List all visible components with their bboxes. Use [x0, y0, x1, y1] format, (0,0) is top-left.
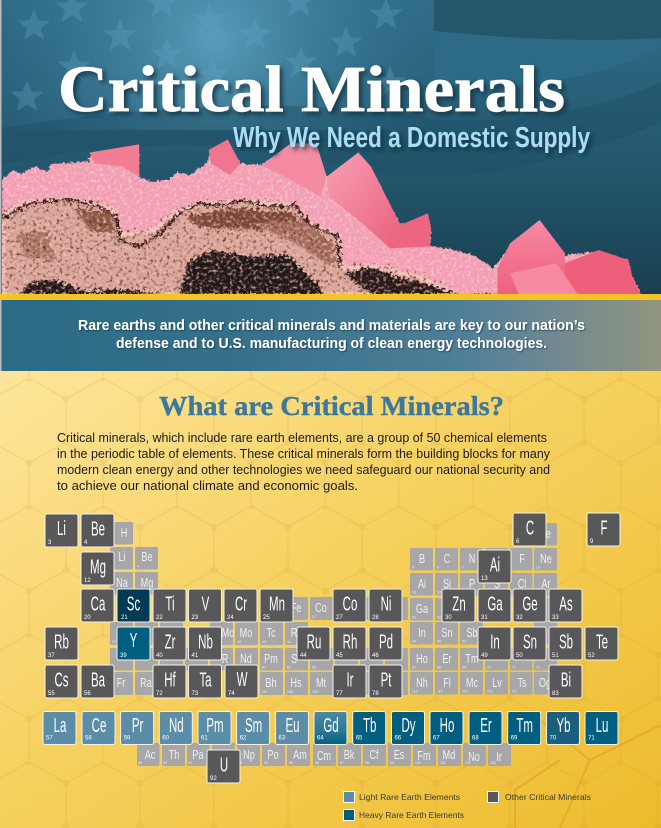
background grey periodic table: Ga: [416, 603, 429, 616]
critical mineral tiles: Sn: [523, 630, 537, 653]
background grey periodic table: 51: [462, 640, 466, 644]
critical mineral tiles: F: [600, 516, 608, 539]
background grey periodic table: 49: [412, 640, 416, 644]
background grey periodic table: Md: [443, 749, 455, 762]
background grey periodic table: Nh: [416, 677, 428, 690]
critical mineral tiles: Hf: [164, 668, 176, 691]
critical mineral tiles: 4: [84, 540, 88, 546]
banner text: [78, 318, 585, 352]
background grey periodic table: Po: [267, 749, 279, 762]
background grey periodic table: F: [519, 553, 525, 566]
background grey periodic table: S: [291, 653, 297, 666]
background grey periodic table: 32: [437, 616, 441, 620]
flag stars: [10, 0, 406, 111]
background grey periodic table: In: [418, 627, 426, 640]
critical mineral tiles: 73: [192, 691, 199, 697]
critical mineral tiles: 83: [552, 691, 559, 697]
background grey periodic table: 89: [138, 761, 142, 765]
yellow content panel: [0, 371, 661, 828]
background grey periodic table: Ai: [418, 578, 426, 591]
background grey periodic table: 115: [462, 690, 468, 694]
light rare earth tiles: Eu: [285, 713, 300, 737]
critical mineral tiles: 6: [516, 539, 520, 545]
background grey periodic table: Mt: [316, 677, 327, 690]
critical mineral tiles: 24: [227, 615, 234, 621]
background grey periodic table: Tm: [465, 653, 479, 666]
background grey periodic table: Li: [118, 551, 126, 564]
light rare earth tiles: Ce: [92, 713, 106, 737]
light rare earth tiles: 60: [162, 736, 170, 742]
flag stripes: [0, 0, 661, 177]
intro banner: [2, 300, 661, 371]
background grey periodic table: 91: [188, 761, 192, 765]
background grey periodic table: Nd: [240, 653, 252, 666]
critical mineral tiles: 44: [300, 653, 307, 659]
heavy rare earth tiles: 65: [356, 736, 363, 742]
background grey periodic table: Ar: [541, 578, 551, 591]
body paragraph: to achieve our national climate and economic goals.: [57, 478, 358, 493]
light rare earth tiles: 63: [278, 736, 286, 742]
background grey periodic table: 103: [490, 761, 496, 765]
heavy rare earth tiles: Tm: [516, 713, 533, 737]
background grey periodic table: Am: [293, 749, 307, 762]
mineral inner banding: [2, 198, 455, 294]
critical mineral tiles: Ai: [490, 553, 500, 576]
background grey periodic table: Fr: [117, 677, 126, 690]
background grey periodic table: 107: [262, 690, 268, 694]
background grey periodic table: 62: [287, 666, 291, 670]
critical mineral tiles: 33: [552, 615, 559, 621]
critical mineral tiles: 30: [445, 615, 452, 621]
critical mineral tiles: Li: [57, 516, 66, 540]
legend: light rare earth: Light Rare Earth Elements: [359, 792, 460, 802]
light rare earth tiles: Pm: [206, 713, 224, 737]
critical mineral tiles: 9: [590, 539, 594, 545]
heavy rare earth tiles: 66: [394, 736, 402, 742]
background grey periodic table: 100: [415, 761, 421, 765]
critical mineral tiles: Ta: [199, 668, 212, 691]
background grey periodic table: 102: [465, 761, 471, 765]
light rare earth tiles: 64: [317, 736, 324, 742]
background grey periodic table: Fe: [291, 602, 301, 615]
light rare earth tiles: [43, 712, 347, 744]
background grey periodic table: 67: [412, 666, 416, 670]
background grey periodic table: 99: [390, 761, 394, 765]
heavy rare earth tiles: Dy: [401, 713, 416, 737]
mineral crystals: [89, 139, 641, 294]
background grey periodic table: 14: [437, 590, 441, 594]
critical mineral tiles: Cr: [235, 592, 247, 615]
body paragraph: [57, 430, 550, 493]
critical mineral tiles: 74: [228, 691, 235, 697]
critical mineral tiles: As: [559, 592, 573, 615]
mineral crust: [2, 147, 641, 294]
critical mineral tiles: Cs: [54, 668, 69, 691]
heavy rare earth tiles: 68: [472, 736, 479, 742]
background grey periodic table: Mg: [141, 577, 153, 590]
critical mineral tiles: Mg: [90, 555, 106, 578]
background grey periodic table: N: [469, 553, 475, 566]
background grey periodic table: 70: [487, 666, 491, 670]
background grey periodic table: 60: [237, 666, 241, 670]
background grey periodic table: 4: [137, 564, 139, 568]
background grey periodic table: R: [222, 653, 228, 666]
background grey periodic table: No: [468, 751, 480, 764]
critical mineral tiles: Te: [596, 630, 608, 653]
background grey periodic table: Tc: [266, 627, 276, 640]
critical mineral tiles: C: [526, 516, 534, 539]
background grey periodic table: 96: [315, 761, 319, 765]
background grey periodic table: H: [121, 527, 127, 540]
background grey periodic table: 98: [365, 761, 369, 765]
critical mineral tiles: Ni: [381, 592, 391, 615]
background grey periodic table: 114: [437, 690, 443, 694]
flag canton glow: [0, 0, 434, 130]
critical mineral tiles: 25: [263, 615, 270, 621]
critical mineral tiles: Ge: [522, 592, 538, 615]
background grey periodic table: Er: [442, 653, 452, 666]
critical mineral tiles: Zn: [452, 592, 466, 615]
background grey periodic table: P: [469, 578, 475, 591]
background grey periodic table: R: [291, 627, 297, 640]
background grey periodic table: 95: [289, 761, 293, 765]
background grey periodic table: S: [494, 578, 500, 591]
critical mineral tiles: 22: [156, 615, 163, 621]
legend: other critical minerals: Other Critical Minerals: [505, 792, 591, 802]
heavy rare earth tiles: 69: [511, 736, 518, 742]
background grey periodic table: Bk: [344, 749, 355, 762]
background grey periodic table: 109: [312, 690, 318, 694]
scandium and yttrium tiles: Y: [130, 628, 137, 652]
critical mineral tiles: Be: [91, 517, 105, 540]
background grey periodic table: 71: [512, 666, 516, 670]
critical mineral tiles: Rh: [343, 630, 357, 653]
background grey periodic table: 37: [112, 640, 116, 644]
heavy rare earth tiles: 71: [588, 736, 595, 742]
light rare earth tiles: 59: [124, 736, 131, 742]
critical mineral tiles: 52: [588, 653, 595, 659]
background grey periodic table: 13: [412, 590, 416, 594]
critical mineral tiles: Pd: [379, 630, 393, 653]
critical mineral tiles: Ru: [307, 630, 321, 653]
light rare earth tiles: La: [54, 713, 67, 737]
light rare earth tiles: Sm: [245, 713, 262, 737]
critical mineral tiles: 50: [516, 653, 523, 659]
legend: [344, 792, 591, 820]
light rare earth tiles: Pr: [132, 713, 144, 737]
banner text: defense and to U.S. manufacturing of clean energy technologies.: [116, 336, 547, 352]
background grey periodic table: 43: [262, 640, 266, 644]
critical mineral tiles: 77: [336, 691, 343, 697]
background grey periodic table: 97: [340, 761, 344, 765]
critical mineral tiles: U: [220, 753, 228, 776]
background grey periodic table: 68: [437, 666, 441, 670]
light rare earth tiles: 58: [85, 736, 92, 742]
background grey periodic table: O: [493, 553, 501, 566]
background grey periodic table: Mc: [466, 677, 478, 690]
critical mineral tiles: 49: [481, 653, 488, 659]
title: Critical Minerals: [58, 53, 565, 126]
critical mineral tiles: Ga: [487, 592, 503, 615]
background grey periodic table: Mo: [222, 627, 234, 640]
background grey periodic table: 61: [262, 666, 266, 670]
background grey periodic table: 72: [536, 666, 540, 670]
background grey periodic table: C: [444, 553, 450, 566]
light rare earth tiles: Gd: [323, 713, 339, 737]
critical mineral tiles: Zr: [165, 630, 176, 653]
heavy rare earth tiles: 70: [550, 736, 557, 742]
background grey periodic table: 5: [412, 566, 414, 570]
banner text: Rare earths and other critical minerals and materials are key to our nation’s: [78, 318, 585, 334]
background grey periodic table: 6: [437, 566, 439, 570]
critical mineral tiles: V: [202, 592, 209, 615]
scandium and yttrium tiles: [117, 589, 150, 660]
critical mineral tiles: 31: [481, 615, 488, 621]
light rare earth tiles: 62: [240, 736, 247, 742]
critical mineral tiles: 51: [552, 653, 559, 659]
heavy rare earth tiles: [353, 712, 618, 744]
background grey periodic table: Fm: [417, 750, 431, 763]
background grey periodic table: 27: [312, 615, 316, 619]
heavy rare earth tiles: Yb: [556, 713, 571, 737]
background grey periodic table: Pm: [264, 653, 278, 666]
background grey periodic table: Mo: [240, 627, 252, 640]
background grey periodic table: Si: [443, 578, 451, 591]
background grey periodic table: He: [539, 528, 551, 541]
background grey periodic table: Lv: [492, 677, 502, 690]
background grey periodic table: 63: [312, 666, 316, 670]
critical mineral tiles: 45: [336, 653, 343, 659]
body paragraph: modern clean energy and other technologies we need safeguard our national security and: [57, 462, 550, 477]
background grey periodic table: Co: [315, 602, 327, 615]
background grey periodic table: 31: [412, 616, 416, 620]
critical mineral tiles: 27: [336, 615, 343, 621]
background grey periodic table: Es: [394, 749, 405, 762]
background grey periodic table: Ts: [517, 677, 527, 690]
background grey periodic table: Cf: [369, 749, 379, 762]
background grey periodic table: Og: [539, 677, 551, 690]
critical mineral tiles: 56: [84, 691, 91, 697]
critical mineral tiles: Ca: [91, 592, 106, 615]
gold divider bar: [0, 294, 661, 300]
background grey periodic table: Ho: [416, 653, 428, 666]
background grey periodic table: 101: [440, 761, 446, 765]
scandium and yttrium tiles: 39: [120, 653, 127, 659]
critical mineral tiles: In: [490, 630, 500, 653]
background grey periodic table: Fl: [443, 677, 451, 690]
background grey periodic table: 44: [287, 640, 291, 644]
background grey periodic table: 7: [462, 566, 464, 570]
background grey periodic table: Ir: [496, 751, 502, 764]
critical mineral tiles: 46: [372, 653, 379, 659]
body paragraph: Critical minerals, which include rare earth elements, are a group of 50 chemical elements: [57, 430, 547, 445]
scandium and yttrium tiles: Sc: [127, 592, 140, 615]
background grey periodic table: 108: [287, 690, 293, 694]
background grey periodic table: Ne: [540, 553, 552, 566]
background grey periodic table: Cm: [317, 750, 331, 763]
critical mineral tiles: 37: [48, 653, 55, 659]
critical mineral tiles: 41: [192, 653, 199, 659]
light rare earth tiles: Nd: [169, 713, 184, 737]
mineral specimen: [2, 139, 641, 294]
heavy rare earth tiles: Ho: [440, 713, 454, 737]
background grey periodic table: B: [419, 553, 425, 566]
background grey periodic table: 50: [437, 640, 441, 644]
critical mineral tiles: 3: [48, 540, 52, 546]
critical mineral tiles: 32: [516, 615, 523, 621]
background grey periodic table: 10: [536, 566, 540, 570]
critical mineral tiles: [45, 513, 620, 783]
section heading: What are Critical Minerals?: [159, 391, 504, 421]
legend: heavy rare earth: Heavy Rare Earth Elements: [359, 810, 464, 820]
critical mineral tiles: 20: [84, 615, 91, 621]
heavy rare earth tiles: Tb: [363, 713, 376, 737]
hero header: [0, 0, 661, 294]
background grey periodic table: Np: [243, 749, 255, 762]
critical mineral tiles: Ba: [91, 668, 106, 691]
background grey periodic table: Na: [116, 577, 128, 590]
critical mineral tiles: Ti: [165, 592, 175, 615]
light rare earth tiles: 61: [201, 736, 208, 742]
background grey periodic table: 117: [512, 690, 518, 694]
background grey periodic table: Th: [169, 749, 179, 762]
background grey periodic table: 94: [264, 761, 268, 765]
critical mineral tiles: 28: [372, 615, 379, 621]
background grey periodic table: Sb: [466, 627, 478, 640]
periodic table: [43, 513, 620, 783]
background grey periodic table: 42: [237, 640, 241, 644]
critical mineral tiles: Rb: [54, 630, 69, 653]
background grey periodic table: Ra: [140, 677, 152, 690]
critical mineral tiles: 72: [156, 691, 163, 697]
critical mineral tiles: Sb: [559, 630, 573, 653]
heavy rare earth tiles: 67: [433, 736, 440, 742]
background grey periodic table: Bh: [265, 677, 277, 690]
scandium and yttrium tiles: 21: [121, 615, 128, 621]
critical mineral tiles: 55: [48, 691, 55, 697]
critical mineral tiles: W: [237, 667, 248, 691]
body paragraph: in the periodic table of elements. These critical minerals form the building blocks for many: [57, 446, 550, 461]
background grey periodic table: 93: [238, 761, 242, 765]
critical mineral tiles: 78: [372, 691, 379, 697]
critical mineral tiles: Co: [343, 592, 357, 615]
background grey periodic table: 113: [412, 690, 418, 694]
background grey periodic table: Cl: [518, 578, 526, 591]
critical mineral tiles: Mn: [269, 592, 285, 615]
background grey periodic table: Hs: [290, 677, 302, 690]
left edge line: [0, 0, 2, 371]
background grey periodic table: Be: [141, 551, 153, 564]
critical mineral tiles: 12: [84, 578, 91, 584]
critical mineral tiles: 92: [210, 776, 217, 782]
heavy rare earth tiles: Er: [480, 713, 492, 737]
critical mineral tiles: Nb: [198, 630, 213, 653]
background grey periodic table: 116: [487, 690, 493, 694]
background grey periodic table: [110, 522, 557, 766]
background grey periodic table: Sn: [441, 627, 453, 640]
critical mineral tiles: Pt: [381, 668, 392, 691]
critical mineral tiles: Ir: [346, 668, 354, 691]
critical mineral tiles: Bi: [561, 668, 571, 691]
light rare earth tiles: 57: [46, 736, 53, 742]
critical mineral tiles: 23: [192, 615, 199, 621]
background grey periodic table: Pa: [192, 749, 204, 762]
background grey periodic table: 69: [462, 666, 466, 670]
background grey periodic table: 90: [163, 761, 167, 765]
critical mineral tiles: 13: [481, 576, 488, 582]
background grey periodic table: Ac: [145, 749, 156, 762]
critical mineral tiles: 40: [156, 653, 163, 659]
heavy rare earth tiles: Lu: [596, 713, 608, 737]
